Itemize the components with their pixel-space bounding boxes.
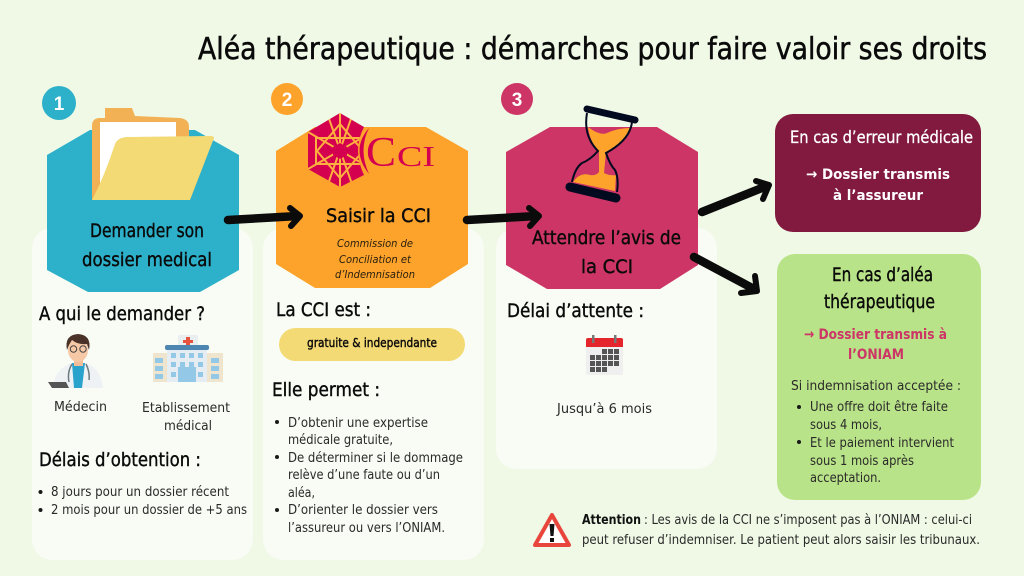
step 2 number badge: 2: [282, 90, 292, 111]
icon: calendar: [586, 335, 623, 375]
icon: warning triangle: [535, 515, 569, 545]
step 1 number badge: [42, 86, 76, 120]
icon: hospital: [153, 335, 223, 382]
list: compensation terms: [797, 400, 954, 486]
step 2 subtitle: Commission de: [337, 237, 413, 250]
list: what it allows: [275, 416, 463, 536]
label: medical facility: médical: [164, 419, 212, 434]
medical error outcome: → Dossier transmis: [806, 167, 950, 183]
pill: free and independent: [279, 328, 465, 361]
label: doctor: Médecin: [54, 400, 107, 415]
callout: attention note: peut refuser d’indemniser. Le patient peut alors saisir les tribunaux.: [582, 533, 980, 548]
list: what it allows: D’orienter le dossier vers: [288, 503, 438, 518]
icon: doctor: [48, 334, 103, 388]
panel: medical error: [775, 114, 981, 232]
arrow: step 2 to step 3: [467, 208, 539, 226]
step 1 heading: [82, 220, 212, 271]
step 2 subtitle: d’Indemnisation: [335, 268, 415, 281]
icon: CCI logo: CI: [397, 141, 435, 173]
list: what it allows: De déterminer si le dommage: [288, 451, 463, 466]
step 2 octagon: [276, 127, 468, 288]
list: delays: 2 mois pour un dossier de +5 ans: [51, 503, 247, 518]
list: what it allows: l’assureur ou vers l’ONIAM.: [288, 521, 445, 536]
heading: waiting time: Délai d’attente :: [507, 300, 644, 322]
arrow: step 3 to medical error: [702, 181, 769, 212]
step 2 subtitle: [335, 237, 415, 281]
list: compensation terms: Une offre doit être faite: [810, 400, 948, 415]
list: delays: 8 jours pour un dossier récent: [51, 485, 229, 500]
heading: the CCI is: La CCI est :: [276, 299, 371, 321]
icon: CCI logo: C: [366, 130, 396, 176]
therapeutic hazard heading: [824, 264, 935, 313]
therapeutic hazard heading: En cas d’aléa: [832, 264, 933, 286]
icon: CCI logo: [308, 113, 435, 187]
step 1 heading: dossier medical: [82, 249, 212, 271]
therapeutic hazard outcome: l’ONIAM: [848, 347, 904, 363]
step 1 octagon: [47, 130, 239, 292]
text: if compensation accepted: Si indemnisation acceptée :: [791, 379, 961, 394]
pill: free and independent: gratuite & independante: [307, 336, 437, 350]
step 3 number badge: [501, 83, 533, 115]
heading: who to ask: A qui le demander ?: [39, 303, 205, 325]
therapeutic hazard outcome: [804, 327, 947, 363]
text: up to 6 months: Jusqu’à 6 mois: [556, 402, 652, 417]
panel: step 3 details: [496, 83, 717, 469]
icon: folder: [92, 108, 214, 200]
step 1 number badge: 1: [54, 94, 65, 115]
step 1 heading: Demander son: [90, 220, 204, 242]
callout: attention note: : Les avis de la CCI ne s’imposent pas à l’ONIAM : celui-ci: [644, 513, 972, 528]
step 2 subtitle: Conciliation et: [339, 253, 412, 266]
icon: hourglass: [570, 109, 635, 198]
list: compensation terms: sous 1 mois après: [810, 454, 914, 469]
callout: attention note: Attention: [582, 513, 641, 528]
therapeutic hazard outcome: → Dossier transmis à: [804, 327, 947, 343]
list: what it allows: aléa,: [288, 486, 315, 501]
medical error outcome: [806, 167, 950, 204]
list: compensation terms: Et le paiement intervient: [810, 436, 954, 451]
list: what it allows: médicale gratuite,: [288, 433, 393, 448]
list: what it allows: D’obtenir une expertise: [288, 416, 428, 431]
step 3 octagon: [506, 127, 698, 289]
step 3 heading: Attendre l’avis de: [532, 227, 681, 249]
list: compensation terms: acceptation.: [810, 471, 881, 486]
label: medical facility: Etablissement: [142, 401, 230, 416]
step 2 number badge: [271, 83, 303, 115]
list: what it allows: relève d’une faute ou d’un: [288, 468, 440, 483]
medical error heading: En cas d’erreur médicale: [790, 128, 973, 148]
arrow: step 3 to therapeutic hazard: [694, 257, 757, 293]
list: delays: [38, 485, 247, 518]
therapeutic hazard heading: thérapeutique: [824, 291, 935, 313]
list: compensation terms: sous 4 mois,: [810, 418, 882, 433]
step 3 heading: [532, 227, 681, 278]
callout: attention note: [582, 513, 980, 548]
medical error outcome: à l’assureur: [833, 188, 924, 204]
label: medical facility: [142, 401, 230, 434]
step 3 heading: la CCI: [581, 256, 633, 278]
panel: therapeutic hazard: [777, 254, 981, 500]
heading: delays: Délais d’obtention :: [39, 449, 201, 471]
step 2 heading: Saisir la CCI: [326, 205, 431, 227]
arrow: step 1 to step 2: [228, 208, 300, 226]
panel: step 2 details: [263, 83, 484, 560]
heading: it allows: Elle permet :: [272, 379, 380, 401]
panel: step 1 details: [32, 86, 253, 560]
step 3 number badge: 3: [512, 90, 522, 111]
